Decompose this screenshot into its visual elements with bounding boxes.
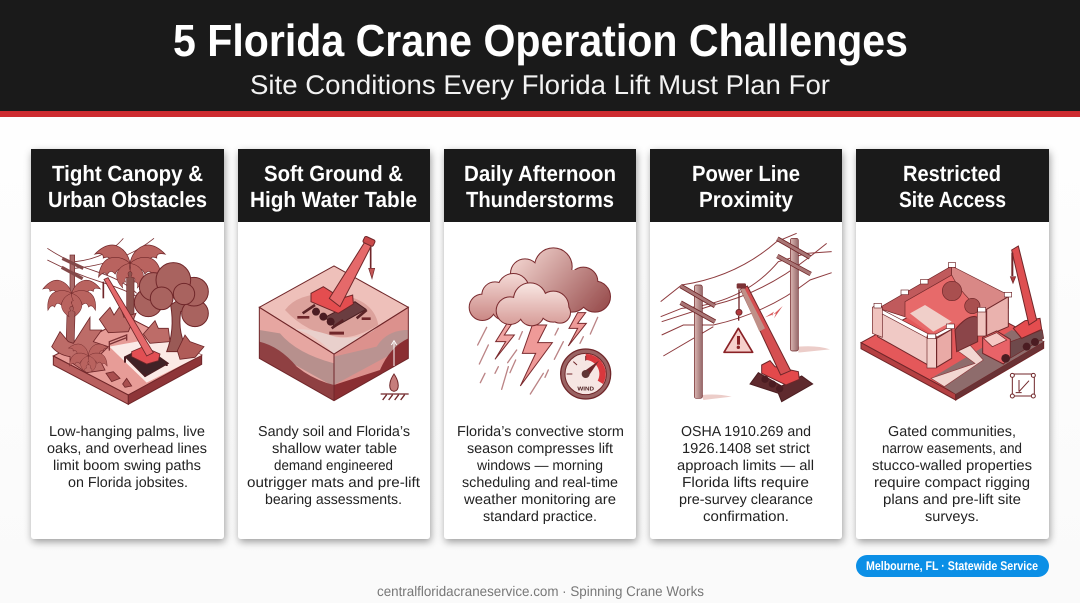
footer source line: centralfloridacraneservice.com · Spinning Crane Works <box>377 583 704 599</box>
panel heading: Daily Afternoon <box>464 161 616 186</box>
panel description: standard practice. <box>483 509 597 525</box>
panel description: Sandy soil and Florida’s <box>258 424 410 440</box>
panel description: OSHA 1910.269 and <box>681 424 811 440</box>
icon: storm clouds, lightning, rain and wind gauge: WIND <box>577 385 594 392</box>
panel description: pre-survey clearance <box>679 492 813 508</box>
panel heading <box>856 149 1049 222</box>
panel heading: Restricted <box>903 161 1001 186</box>
panel description: Florida’s convective storm <box>457 424 624 440</box>
panel description: Florida lifts require <box>682 475 809 491</box>
panel description: shallow water table <box>272 441 397 457</box>
panel description: surveys. <box>925 509 979 525</box>
subtitle: Site Conditions Every Florida Lift Must Plan For <box>250 70 830 100</box>
header band <box>0 0 1080 117</box>
panel heading <box>31 149 224 222</box>
icon: storm clouds, lightning, rain and wind gauge <box>470 248 611 399</box>
panel description: season compresses lift <box>467 441 613 457</box>
panel description: narrow easements, and <box>882 441 1022 457</box>
panel: daily afternoon thunderstorms <box>444 149 636 539</box>
panel description: limit boom swing paths <box>53 458 201 474</box>
panel description: oaks, and overhead lines <box>47 441 207 457</box>
panel description: stucco-walled properties <box>872 458 1032 474</box>
location badge: Melbourne, FL · Statewide Service <box>866 559 1038 573</box>
icon: crane near power lines with warning triangle <box>661 233 832 402</box>
panel heading: Urban Obstacles <box>48 187 207 212</box>
panel: power line proximity <box>650 149 842 539</box>
panel description <box>872 424 1032 525</box>
panel heading: Thunderstorms <box>466 187 614 212</box>
panel heading: Site Access <box>899 187 1006 212</box>
panel heading <box>238 149 430 222</box>
panel: restricted site access <box>856 149 1049 539</box>
panel description: require compact rigging <box>874 475 1030 491</box>
location badge <box>856 555 1049 577</box>
title: 5 Florida Crane Operation Challenges <box>173 15 908 66</box>
panel description: 1926.1408 set strict <box>682 441 810 457</box>
panel description: demand engineered <box>274 458 393 474</box>
panel description: outrigger mats and pre-lift <box>247 475 420 491</box>
panel description <box>247 424 420 508</box>
icon: palms, tree, wires and crane on a lot <box>43 238 208 404</box>
panel heading <box>650 149 842 222</box>
panel: soft ground and high water table <box>238 149 430 539</box>
panel description: on Florida jobsites. <box>68 475 188 491</box>
panel heading: High Water Table <box>250 187 417 212</box>
panel: tight canopy and urban obstacles <box>31 149 224 539</box>
panel description <box>47 424 207 491</box>
panel description: scheduling and real-time <box>462 475 618 491</box>
panel heading: Tight Canopy & <box>52 161 203 186</box>
panel heading: Proximity <box>699 187 794 212</box>
panel heading: Soft Ground & <box>264 161 403 186</box>
panel description <box>677 424 814 525</box>
panel description <box>457 424 624 525</box>
icon: walled property with gate and truck crane <box>861 246 1044 400</box>
panel description: bearing assessments. <box>265 492 402 508</box>
panel description: Low-hanging palms, live <box>49 424 205 440</box>
panel heading: Power Line <box>692 161 800 186</box>
panel description: plans and pre-lift site <box>883 492 1021 508</box>
panel description: Gated communities, <box>888 424 1016 440</box>
panel heading <box>444 149 636 222</box>
icon: soil cross-section with crane and rising water table <box>259 236 409 401</box>
panel description: confirmation. <box>703 509 789 525</box>
panel description: approach limits — all <box>677 458 814 474</box>
panel description: weather monitoring are <box>463 492 616 508</box>
panel description: windows — morning <box>476 458 603 474</box>
